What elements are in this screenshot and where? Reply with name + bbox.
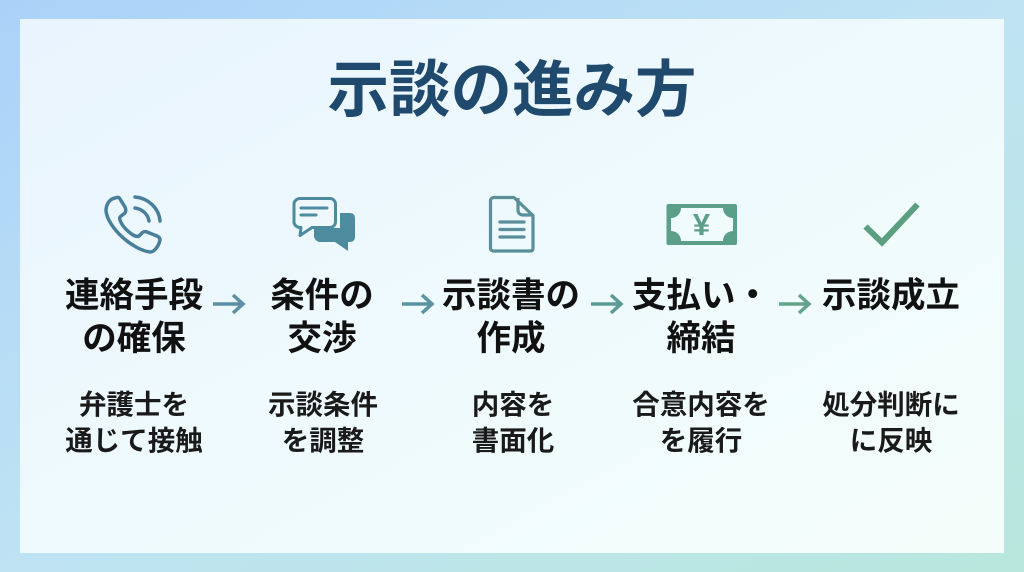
icon: phone [106, 197, 160, 252]
icon: yen banknote [666, 204, 737, 245]
arrow 4 [779, 295, 809, 313]
step 5 description: 処分判断に [822, 389, 960, 420]
step 2 heading: 条件の [270, 277, 374, 315]
step 4 heading [632, 277, 770, 358]
arrow 1 [213, 295, 243, 313]
step 5 heading: 示談成立 [822, 277, 960, 315]
step 4 description: 合意内容を [632, 389, 770, 420]
step 2 description: を調整 [282, 425, 364, 456]
step 4 description [632, 389, 770, 456]
step 3 heading [442, 277, 580, 358]
step 2 heading [270, 277, 374, 358]
step 5 description: に反映 [850, 425, 932, 456]
step 3 heading: 作成 [476, 320, 546, 358]
step 2 description [268, 389, 378, 456]
icon: chat bubbles [294, 198, 355, 251]
arrow 2 [402, 295, 432, 313]
arrow 3 [591, 295, 621, 313]
step 3 heading: 示談書の [442, 277, 580, 315]
step 1 description: 通じて接触 [65, 425, 203, 456]
step 1 heading: の確保 [82, 320, 186, 358]
step 3 description: 内容を [472, 389, 554, 420]
icon: yen banknote: ¥ [693, 207, 711, 242]
step 4 description: を履行 [660, 425, 742, 456]
icon: check mark [866, 204, 918, 242]
step 1 description [65, 389, 203, 456]
step 1 heading [65, 277, 203, 358]
step 1 heading: 連絡手段 [65, 277, 203, 315]
step 1 description: 弁護士を [79, 389, 189, 420]
step 2 description: 示談条件 [268, 389, 378, 420]
title: 示談の進み方 [327, 56, 697, 125]
step 4 heading: 締結 [666, 320, 736, 358]
step 5 description [822, 389, 960, 456]
step 3 description [472, 389, 554, 456]
step 4 heading: 支払い・ [632, 277, 770, 315]
icon: document [490, 198, 533, 251]
step 2 heading: 交渉 [288, 320, 356, 358]
step 3 description: 書面化 [472, 425, 554, 456]
